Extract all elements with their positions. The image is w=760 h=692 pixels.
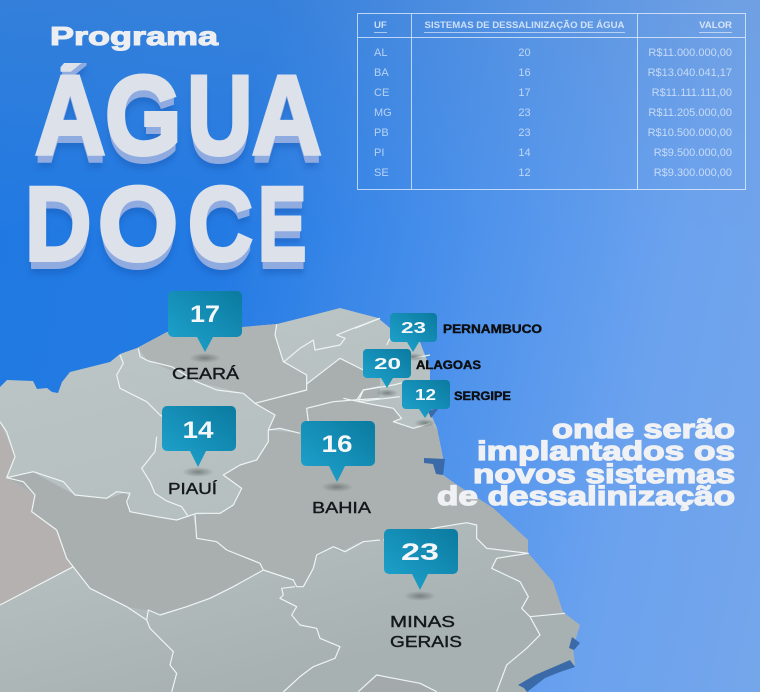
region: western state (0, 422, 73, 605)
data table: PI (374, 147, 384, 159)
data table: 12 (518, 167, 531, 179)
callout: onde serão implantados os novos sistemas de dessalinização: novos sistemas (473, 459, 735, 489)
title: Água Doce: U (187, 53, 253, 178)
data table: VALOR (699, 20, 732, 31)
data table: 23 (518, 107, 531, 119)
label: Alagoas: ALAGOAS (416, 360, 481, 372)
title: Água Doce: C (188, 166, 253, 283)
region: Bahia (195, 398, 528, 587)
land mass (0, 308, 580, 692)
pin: Pernambuco 23: 23 (401, 320, 426, 337)
data table: 20 (518, 47, 531, 59)
label: Sergipe: SERGIPE (454, 391, 511, 403)
data table: SE (374, 167, 389, 179)
region: Ceará (138, 324, 307, 403)
region: Paraíba (255, 358, 380, 433)
data table: R$9.300.000,00 (654, 167, 732, 179)
callout: onde serão implantados os novos sistemas de dessalinização: implantados os (477, 436, 735, 466)
pin: Alagoas 20 (363, 349, 411, 397)
label: Minas Gerais: GERAIS (390, 634, 462, 651)
data table: R$9.500.000,00 (654, 147, 732, 159)
data table: 16 (518, 67, 531, 79)
data table: R$11.111.111,00 (652, 87, 732, 99)
pin: Bahia 16 (301, 421, 375, 492)
pin: Pernambuco 23 (390, 313, 437, 361)
label: Piauí: PIAUÍ (168, 479, 218, 498)
label: Ceará: CEARÁ (172, 364, 239, 383)
region: south interior (358, 675, 437, 692)
data table: CE (374, 87, 389, 99)
title: Água Doce: A (252, 53, 322, 178)
lagoon (424, 458, 445, 475)
data table: 17 (518, 87, 531, 99)
label: Pernambuco: PERNAMBUCO (443, 324, 542, 336)
data table: SISTEMAS DE DESSALINIZAÇÃO DE ÁGUA (425, 20, 624, 31)
title: Água Doce: D (25, 166, 91, 283)
region: Tocantins (7, 472, 263, 615)
region: Espírito Santo (492, 553, 563, 617)
data table: MG (374, 107, 392, 119)
data table: PB (374, 127, 389, 139)
data table: 23 (518, 127, 531, 139)
title: Água Doce (25, 53, 322, 283)
state borders (0, 318, 380, 692)
pin: Bahia 16: 16 (322, 431, 352, 458)
callout: onde serão implantados os novos sistemas de dessalinização (437, 414, 735, 511)
data table: R$10.500.000,00 (648, 127, 732, 139)
heading: Programa: Programa (50, 21, 219, 51)
callout: onde serão implantados os novos sistemas de dessalinização: onde serão (552, 414, 735, 444)
title: Água Doce: Á (35, 53, 105, 178)
data table: R$13.040.041,17 (648, 67, 732, 79)
coastal water south (518, 637, 580, 692)
pin: Sergipe 12 (402, 380, 450, 427)
callout: onde serão implantados os novos sistemas de dessalinização: de dessalinização (437, 481, 735, 511)
data table: R$11.000.000,00 (648, 47, 732, 59)
data table: AL (374, 47, 387, 59)
data table: 14 (518, 147, 531, 159)
pin: Minas Gerais 23: 23 (401, 539, 439, 566)
data table: UF (374, 20, 387, 31)
data table: R$11.205.000,00 (648, 107, 732, 119)
pin: Piauí 14 (162, 406, 236, 477)
data table (357, 13, 746, 190)
label: Minas Gerais (390, 614, 462, 651)
pin: Ceará 17 (168, 291, 242, 363)
pin: Minas Gerais 23 (384, 529, 458, 601)
label: Minas Gerais: MINAS (390, 614, 455, 631)
title: Água Doce: O (98, 166, 178, 283)
coastal water north (428, 408, 439, 418)
pin: Ceará 17: 17 (190, 301, 220, 328)
title: Água Doce: G (105, 53, 182, 178)
pin: Sergipe 12: 12 (415, 387, 436, 404)
title: Água Doce: E (258, 166, 306, 283)
data table: BA (374, 67, 389, 79)
pin: Alagoas 20: 20 (374, 356, 401, 373)
label: Bahia: BAHIA (312, 500, 371, 517)
pin: Piauí 14: 14 (182, 417, 214, 444)
